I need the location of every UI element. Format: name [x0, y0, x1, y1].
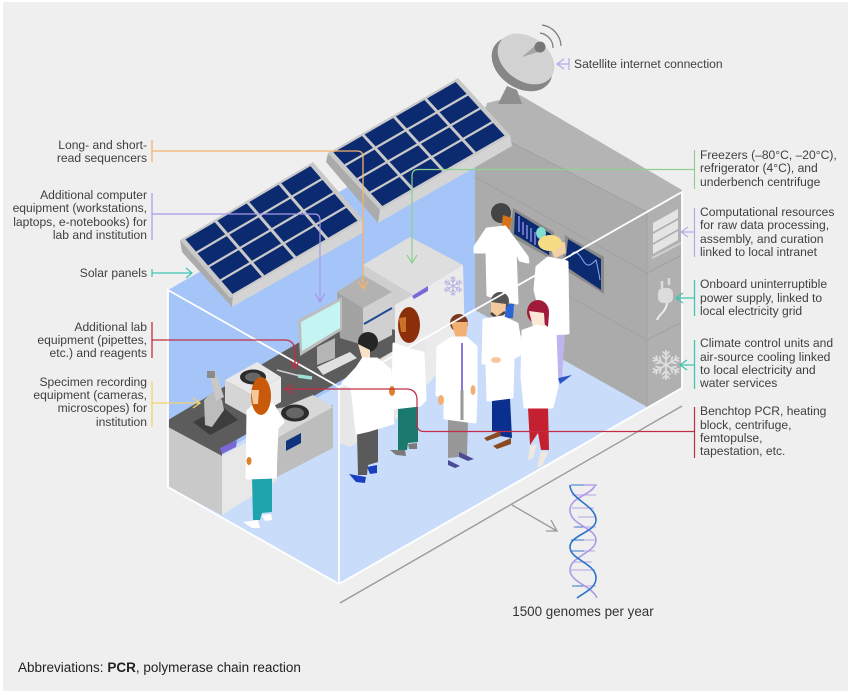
sequencer	[337, 275, 392, 350]
callout: power supply: power supply, linked to	[700, 291, 822, 305]
solar panel left	[180, 162, 364, 307]
callout: computer equipment: equipment (workstations,	[13, 201, 147, 215]
callout: lab equipment	[37, 320, 299, 369]
icon: snowflake climate control	[652, 351, 680, 379]
blue back wall	[168, 114, 475, 487]
callout: climate control	[680, 336, 833, 390]
researcher: bearded male	[483, 292, 522, 449]
callout: benchtop pcr	[285, 384, 826, 458]
callout: power supply: Onboard uninterruptible	[700, 277, 827, 291]
researcher: orange haired woman	[243, 377, 283, 528]
callout: climate control: to local electricity and	[700, 363, 816, 377]
callout: lab equipment: Additional lab	[74, 320, 147, 334]
pipette	[277, 370, 312, 378]
callout: sequencers: read sequencers	[57, 151, 147, 165]
left lab bench	[168, 425, 277, 515]
callout: power supply	[676, 277, 827, 318]
callout: sequencers	[57, 138, 368, 289]
callout: freezers	[407, 148, 837, 263]
output label: 1500 genomes per year	[512, 604, 654, 619]
onboard grey service module	[475, 95, 682, 407]
callout: specimen recording	[33, 375, 200, 429]
counter top	[168, 318, 395, 456]
callout: benchtop pcr: Benchtop PCR, heating	[700, 404, 826, 418]
callout: specimen recording: microscopes) for	[58, 401, 147, 415]
abbreviations footnote: Abbreviations: PCR, polymerase chain reaction	[18, 660, 301, 675]
researcher: front male with grey trousers	[437, 314, 476, 468]
callout: freezers: refrigerator (4°C), and	[700, 161, 818, 175]
callout: power supply: local electricity grid	[700, 304, 802, 318]
callout: specimen recording: Specimen recording	[39, 375, 147, 389]
benchtop pcr and centrifuge units	[225, 362, 333, 478]
callout: satellite internet: Satellite internet connection	[574, 57, 723, 71]
solar panel right	[326, 78, 512, 223]
arrow: to genomes output	[512, 505, 557, 531]
researcher: dark hair at monitor	[475, 203, 528, 318]
researcher: blonde	[535, 235, 572, 384]
bench behind researchers	[340, 340, 425, 447]
callout: computational resources: assembly, and curation	[700, 232, 823, 246]
callout: freezers: underbench centrifuge	[700, 175, 821, 189]
microscope	[193, 370, 238, 435]
wall monitor 2	[562, 235, 604, 294]
baseline ground line	[340, 406, 682, 603]
researcher: curly hair woman	[390, 307, 425, 456]
freezer	[363, 237, 465, 420]
callout: sequencers: Long- and short-	[58, 138, 147, 152]
callout: computer equipment	[13, 188, 325, 302]
callout: benchtop pcr: tapestation, etc.	[700, 444, 785, 458]
callout: computational resources: linked to local intranet	[700, 245, 818, 259]
callout: solar panels	[80, 266, 192, 280]
callout: benchtop pcr: femtopulse,	[700, 431, 763, 445]
dna helix	[570, 485, 597, 598]
icon: satellite dish	[481, 23, 564, 104]
callout: freezers: Freezers (–80°C, –20°C),	[700, 148, 837, 162]
callout: climate control: Climate control units and	[700, 336, 833, 350]
callout: computational resources: Computational resources	[700, 205, 834, 219]
callout: computer equipment: laptops, e-notebooks) for	[13, 215, 147, 229]
callout: computational resources	[681, 205, 834, 259]
callout: computer equipment: Additional computer	[40, 188, 147, 202]
researcher: black hair man from behind	[343, 332, 395, 483]
researcher: red haired woman	[522, 300, 557, 467]
callout: lab equipment: etc.) and reagents	[50, 346, 147, 360]
container white outline	[168, 192, 682, 584]
callout: climate control: water services	[699, 376, 777, 390]
callout: lab equipment: equipment (pipettes,	[37, 333, 147, 347]
callout: solar panels: Solar panels	[80, 266, 147, 280]
callout: computer equipment: lab and institution	[53, 228, 147, 242]
icon: power plug	[657, 278, 673, 320]
callout: specimen recording: institution	[96, 415, 147, 429]
floor	[168, 308, 647, 584]
callout: benchtop pcr: block, centrifuge,	[700, 418, 791, 432]
computer workstation	[298, 297, 357, 375]
callout: climate control: air-source cooling linked	[700, 350, 830, 364]
icon: computational server	[652, 209, 681, 258]
callout: specimen recording: equipment (cameras,	[33, 388, 147, 402]
wall monitor 1	[510, 208, 554, 259]
callout: computational resources: for raw data processing,	[700, 218, 829, 232]
